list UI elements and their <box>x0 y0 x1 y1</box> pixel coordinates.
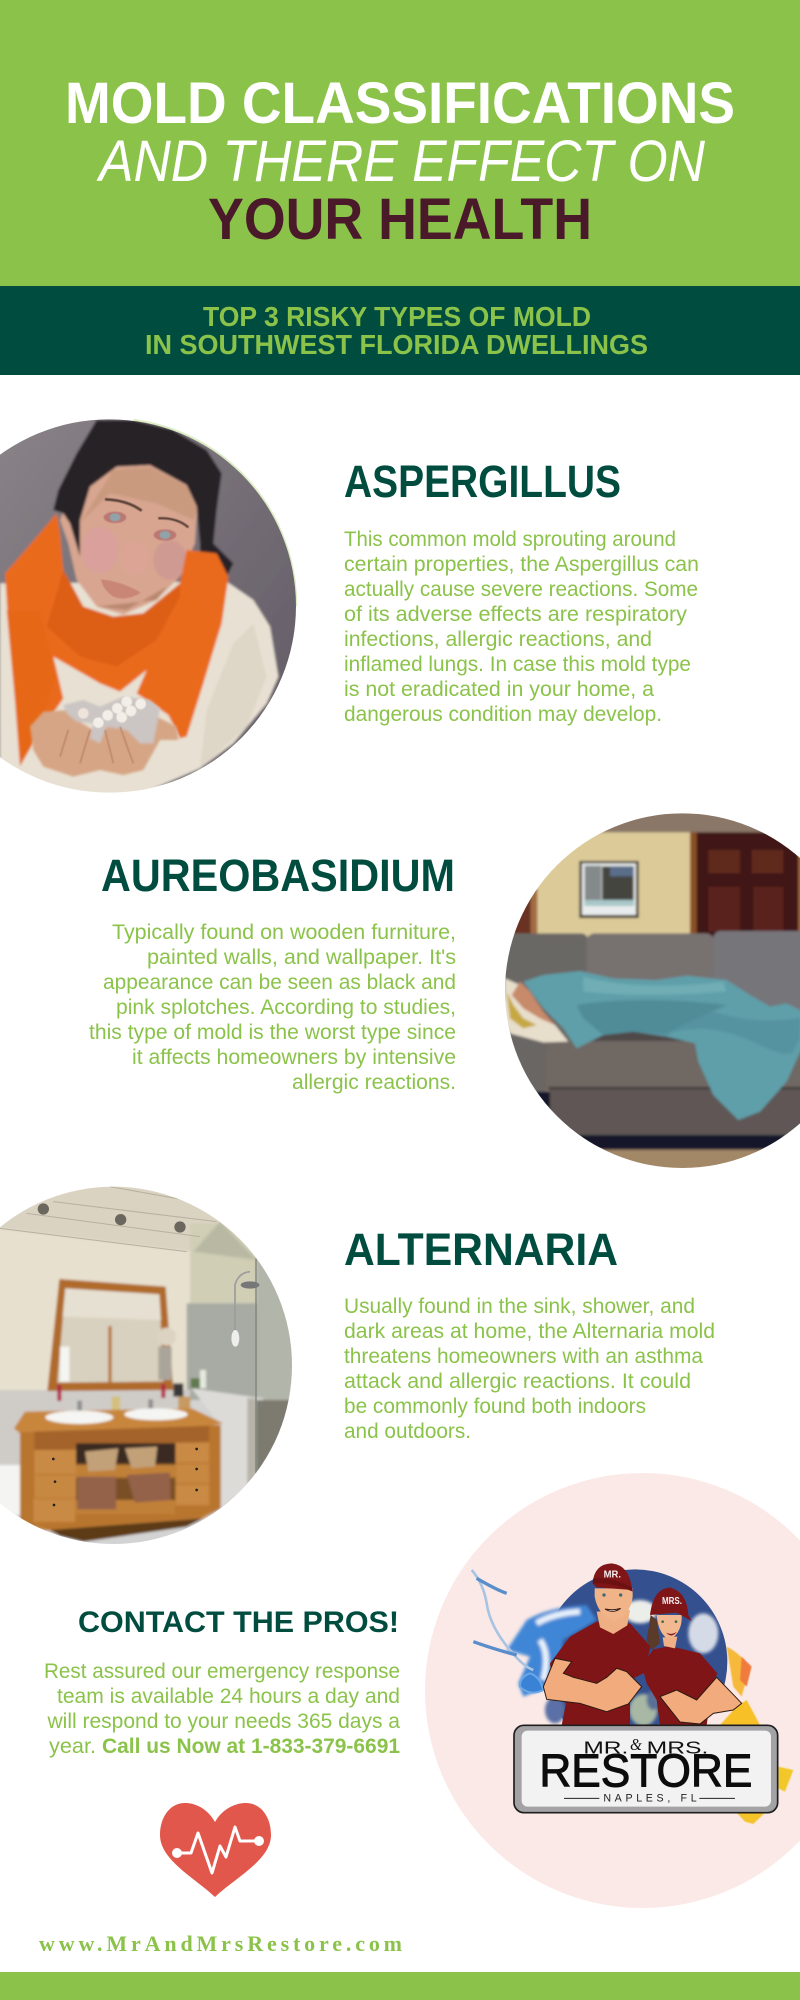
logo plate: & <box>630 1735 642 1754</box>
text block: Aspergillus: infections, allergic reactions, and <box>344 628 652 651</box>
text block: Aspergillus: This common mold sprouting around <box>344 528 676 551</box>
text block: Aureobasidium: allergic reactions. <box>292 1071 456 1094</box>
title line 1: MOLD CLASSIFICATIONS <box>65 71 735 136</box>
text block: Aspergillus: dangerous condition may develop. <box>344 703 662 726</box>
text block: Aureobasidium: it affects homeowners by intensive <box>132 1046 456 1069</box>
subtitle band: IN SOUTHWEST FLORIDA DWELLINGS <box>145 329 648 360</box>
text block: Aspergillus: certain properties, the Aspergillus can <box>344 553 699 576</box>
text block: Aspergillus <box>344 528 699 726</box>
text block: contact details: year. <box>49 1735 96 1758</box>
text block: Aspergillus: inflamed lungs. In case this mold type <box>344 653 691 676</box>
subtitle band <box>0 286 800 375</box>
text block: Alternaria: attack and allergic reactions. It could <box>344 1370 691 1393</box>
text block: Alternaria: and outdoors. <box>344 1420 471 1443</box>
website url: www.MrAndMrsRestore.com <box>39 1931 402 1956</box>
photo: sick woman holding pills <box>0 410 303 810</box>
heading: Aureobasidium: AUREOBASIDIUM <box>101 850 455 901</box>
logo plate: MRS. <box>647 1737 708 1757</box>
woman figure: MRS. <box>662 1596 682 1607</box>
text block: Alternaria <box>344 1295 715 1443</box>
text block: contact details: Rest assured our emergency response <box>44 1660 400 1683</box>
text block: Aureobasidium: painted walls, and wallpaper. It's <box>147 946 456 969</box>
heading: Alternaria: ALTERNARIA <box>344 1224 618 1275</box>
text block: contact details <box>44 1660 400 1758</box>
subtitle band: TOP 3 RISKY TYPES OF MOLD <box>203 301 591 332</box>
text block: contact details: Call us Now at 1-833-379-6691 <box>102 1735 400 1758</box>
title line 3: YOUR HEALTH <box>208 187 592 252</box>
footer band <box>0 1972 800 2000</box>
text block: Aspergillus: of its adverse effects are respiratory <box>344 603 688 626</box>
text block: Alternaria: Usually found in the sink, shower, and <box>344 1295 695 1318</box>
text block: Alternaria: be commonly found both indoors <box>344 1395 646 1418</box>
man figure: MR. <box>604 1569 621 1580</box>
text block: Aureobasidium: Typically found on wooden furniture, <box>112 921 456 944</box>
text block: Alternaria: threatens homeowners with an asthma <box>344 1345 703 1368</box>
woman figure <box>642 1588 742 1725</box>
text block: Aureobasidium: this type of mold is the worst type since <box>89 1021 456 1044</box>
photo: wooden bathroom vanity <box>0 1186 292 1544</box>
logo plate <box>514 1725 778 1813</box>
logo plate: MR. <box>583 1737 628 1757</box>
text block: Aureobasidium: pink splotches. According to studies, <box>116 996 456 1019</box>
text block: Aureobasidium: appearance can be seen as black and <box>103 971 456 994</box>
pink circle backdrop <box>425 1473 800 1908</box>
heading: contact the pros: CONTACT THE PROS! <box>78 1606 399 1639</box>
logo: Mr. & Mrs. Restore <box>472 1563 793 1824</box>
text block: Aureobasidium <box>89 921 456 1094</box>
header banner <box>0 0 800 286</box>
logo plate: RESTORE <box>539 1745 752 1797</box>
man figure <box>543 1563 651 1725</box>
heading: Aspergillus: ASPERGILLUS <box>344 456 621 507</box>
logo plate: NAPLES, FL <box>603 1793 697 1805</box>
text block: Aspergillus: is not eradicated in your home, a <box>344 678 654 701</box>
text block: contact details: will respond to your needs 365 days a <box>47 1710 400 1733</box>
icon: water splash <box>472 1570 597 1697</box>
photo: person under blanket on sofa <box>505 813 800 1168</box>
text block: Aspergillus: actually cause severe reactions. Some <box>344 578 698 601</box>
icon: fire <box>720 1647 793 1824</box>
text block: contact details: team is available 24 hours a day and <box>57 1685 400 1708</box>
icon: earth globe <box>542 1569 728 1724</box>
icon: heart with pulse line <box>160 1803 271 1897</box>
text block: Alternaria: dark areas at home, the Alternaria mold <box>344 1320 715 1343</box>
title line 2: AND THERE EFFECT ON <box>96 129 705 194</box>
